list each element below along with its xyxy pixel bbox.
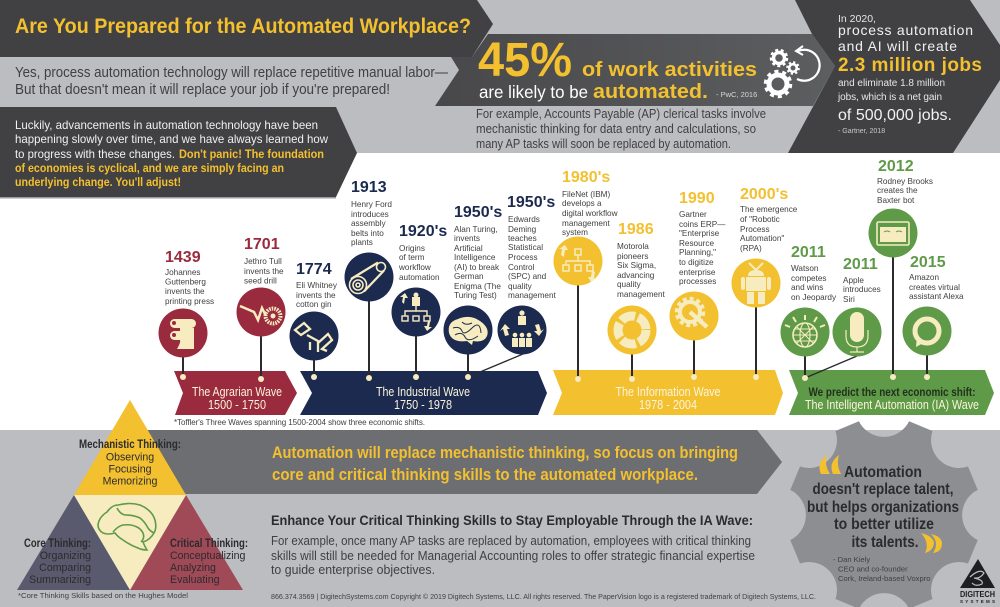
logo: Digitech Systems: DIGITECH bbox=[960, 590, 995, 599]
milestone: 1439 printing press: 1439 bbox=[165, 249, 201, 266]
panel: 45% statistic banner bbox=[435, 34, 835, 106]
wave band: agrarian bbox=[174, 371, 297, 415]
milestone: 1990 ERP: "Enterprise bbox=[679, 229, 720, 238]
milestone: 1950s Turing: (AI) to break bbox=[454, 263, 500, 272]
icon: opening quote mark bbox=[819, 455, 841, 474]
quote text: but helps organizations bbox=[807, 499, 959, 516]
wave band: industrial: 1750 - 1978 bbox=[394, 398, 452, 412]
milestone: 2012 Baxter: creates the bbox=[877, 186, 918, 195]
text: core thinking bbox=[24, 538, 91, 586]
wave band: agrarian: The Agrarian Wave bbox=[192, 385, 282, 399]
milestone: 1774 cotton gin: invents the bbox=[296, 291, 336, 300]
milestone: 2015 Alexa bbox=[902, 254, 964, 380]
icon: Watson globe bbox=[785, 315, 825, 347]
milestone: 1439 printing press: Johannes bbox=[165, 268, 201, 277]
stat text: are likely to be: are likely to be bbox=[479, 82, 588, 102]
panel: 2020 jobs statistic: jobs, which is a net gain bbox=[837, 92, 942, 103]
text: critical thinking: Critical Thinking: bbox=[170, 538, 248, 550]
text block: intro: Yes, process automation technology will replace repetitive manual labor— bbox=[15, 64, 448, 81]
panel: 2020 jobs statistic: of 500,000 jobs. bbox=[838, 107, 952, 124]
wave band: information bbox=[553, 370, 783, 415]
text: core thinking: Core Thinking: bbox=[24, 538, 91, 550]
panel: don't panic chevron bbox=[0, 107, 357, 197]
text block: intro: But that doesn't mean it will replace your job if you're prepared! bbox=[15, 81, 390, 98]
milestone: 2000s RPA: The emergence bbox=[740, 205, 798, 214]
milestone: 1950s Edwards Deming: Process bbox=[508, 253, 538, 262]
panel: 2020 jobs statistic bbox=[788, 0, 1000, 153]
text: critical thinking: Analyzing bbox=[170, 562, 216, 574]
milestone: 1439 printing press bbox=[158, 249, 214, 380]
text: core thinking: Summarizing bbox=[29, 574, 91, 586]
source: PwC: - PwC, 2016 bbox=[716, 90, 757, 99]
milestone: 2015 Alexa: assistant Alexa bbox=[909, 292, 964, 301]
text: critical thinking bbox=[170, 538, 248, 586]
milestone: 1950s Turing: German bbox=[454, 272, 484, 281]
milestone: 1950s Edwards Deming: Statistical bbox=[508, 243, 543, 252]
milestone: 2015 Alexa: Amazon bbox=[909, 273, 939, 282]
milestone: 1990 ERP: to digitize bbox=[679, 258, 714, 267]
milestone: 1774 cotton gin: 1774 bbox=[296, 261, 332, 278]
footnote: Toffler: *Toffler's Three Waves spanning 1500-2004 show three economic shifts. bbox=[174, 418, 425, 427]
text: mechanistic thinking: Memorizing bbox=[103, 476, 157, 488]
arrow banner: mechanistic thinking message bbox=[140, 430, 782, 494]
icon: closing quote mark bbox=[921, 533, 942, 553]
milestone: 2011 Watson: Watson bbox=[791, 264, 819, 273]
milestone: 1980s FileNet: FileNet (IBM) bbox=[562, 190, 610, 199]
milestone: 2011 Siri: introduces bbox=[843, 285, 881, 294]
triangle diagram: thinking skills bbox=[17, 400, 248, 590]
milestone: 1950s Edwards Deming: management bbox=[508, 291, 557, 300]
milestone: 1990 ERP bbox=[670, 190, 726, 380]
icon: gears with circular arrow bbox=[766, 46, 820, 96]
text block: AP example: For example, once many AP tasks are replaced by automation, employees with critical thinking bbox=[271, 534, 751, 548]
wave band: information: The Information Wave bbox=[616, 385, 721, 399]
milestone: 1920s workflow bbox=[392, 223, 447, 380]
milestone: 1986 Six Sigma: pioneers bbox=[617, 252, 648, 261]
text block: accounts payable example: mechanistic thinking for data entry and calculations, so bbox=[476, 122, 756, 136]
milestone: 1950s Edwards Deming: quality bbox=[508, 282, 533, 291]
quote text: doesn't replace talent, bbox=[812, 481, 954, 498]
text block: luckily: Luckily, advancements in automation technology have been bbox=[15, 119, 318, 132]
milestone: 1439 printing press: Guttenberg bbox=[165, 278, 206, 286]
logo: Digitech Systems bbox=[960, 559, 995, 604]
milestone: 1986 Six Sigma: quality bbox=[617, 280, 642, 289]
milestone: 2000s RPA: (RPA) bbox=[740, 244, 762, 253]
milestone: 1701 seed drill: invents the bbox=[244, 267, 284, 276]
milestone: 1950s Edwards Deming: Control bbox=[508, 263, 535, 272]
milestone: 1990 ERP: enterprise bbox=[679, 268, 716, 277]
quote text: its talents. bbox=[852, 534, 918, 551]
milestone: 1950s Edwards Deming: (SPC) and bbox=[508, 272, 547, 281]
big stat: 45%: 45% bbox=[478, 34, 572, 87]
quote text: to better utilize bbox=[834, 516, 934, 533]
text: core thinking: Organizing bbox=[40, 550, 91, 562]
panel: 2020 jobs statistic: and AI will create bbox=[838, 38, 957, 54]
milestone: 1913 assembly belts: 1913 bbox=[351, 179, 387, 196]
text: critical thinking: Conceptualizing bbox=[170, 550, 245, 562]
attribution: CEO and co-founder bbox=[838, 564, 908, 574]
milestone: 1950s Turing bbox=[444, 204, 523, 380]
text block: luckily: underlying change. You'll adjust! bbox=[15, 176, 181, 189]
text: mechanistic thinking bbox=[79, 439, 181, 488]
milestone: 2000s RPA: Process bbox=[740, 225, 770, 234]
milestone: 1986 Six Sigma: Motorola bbox=[617, 242, 649, 251]
milestone: 2011 Siri: Apple bbox=[843, 276, 864, 285]
text block: accounts payable example: many AP tasks will soon be replaced by automation. bbox=[476, 137, 731, 151]
milestone: 1950s Turing: Turing Test) bbox=[454, 291, 497, 300]
text: critical thinking: Evaluating bbox=[170, 574, 220, 586]
panel: title chevron bbox=[0, 0, 493, 57]
stat text: of work activities: of work activities bbox=[582, 58, 757, 81]
milestone: 1990 ERP: Resource bbox=[679, 239, 714, 248]
milestone: 1950s Edwards Deming: 1950's bbox=[507, 194, 555, 211]
milestone: 2011 Siri: Siri bbox=[843, 295, 855, 304]
attribution: - Dan Kiely bbox=[833, 555, 870, 564]
wave band: agrarian: 1500 - 1750 bbox=[208, 398, 266, 412]
milestone: 2011 Siri: 2011 bbox=[843, 256, 878, 273]
milestone: 1990 ERP: coins ERP— bbox=[679, 220, 726, 229]
title: Are You Prepared for the Automated Workplace? bbox=[15, 15, 471, 38]
icon: org chart bbox=[559, 245, 597, 282]
footer copyright: 866.374.3569 | DigitechSystems.com Copyright © 2019 Digitech Systems, LLC. All rights reserved. The PaperVision logo is a registered trademark of Digitech Systems, LLC. bbox=[271, 592, 816, 601]
milestone: 2011 Watson bbox=[780, 244, 857, 381]
milestone: 1980s FileNet: 1980's bbox=[562, 169, 610, 186]
milestone: 1980s FileNet bbox=[554, 169, 618, 382]
text: mechanistic thinking: Focusing bbox=[108, 464, 152, 476]
panel: 2020 jobs statistic: process automation bbox=[838, 22, 973, 38]
icon: robot bbox=[741, 263, 771, 304]
milestone: 1701 seed drill bbox=[236, 236, 286, 382]
milestone: 1990 ERP: Planning," bbox=[679, 248, 716, 257]
milestone: 1774 cotton gin: cotton gin bbox=[296, 300, 332, 309]
milestone: 1913 assembly belts: Henry Ford bbox=[351, 200, 392, 209]
milestone: 1986 Six Sigma: 1986 bbox=[618, 221, 654, 238]
milestone: 2012 Baxter bbox=[868, 158, 933, 380]
icon: Baxter screen face bbox=[877, 222, 909, 245]
icon: seed drill bbox=[240, 306, 280, 324]
milestone: 1950s Turing: Intelligence bbox=[454, 253, 496, 262]
arrow banner: mechanistic thinking message: Automation will replace mechanistic thinking, so focus on bringing bbox=[272, 444, 738, 462]
panel: 2020 jobs statistic: and eliminate 1.8 million bbox=[838, 78, 945, 89]
milestone: 1913 assembly belts: assembly bbox=[351, 219, 386, 228]
panel: 2020 jobs statistic: 2.3 million jobs bbox=[838, 55, 982, 76]
milestone: 1950s Turing: Enigma (The bbox=[454, 282, 501, 291]
milestone: 1701 seed drill: 1701 bbox=[244, 236, 280, 253]
milestone: 1950s Turing: 1950's bbox=[454, 204, 502, 221]
milestone: 2012 Baxter: Rodney Brooks bbox=[877, 177, 933, 186]
wave band: industrial bbox=[300, 371, 547, 415]
milestone: 2000s RPA: of "Robotic bbox=[740, 215, 780, 224]
milestone: 1701 seed drill: seed drill bbox=[244, 276, 277, 286]
wave band: industrial: The Industrial Wave bbox=[376, 385, 470, 399]
arrow banner: mechanistic thinking message: core and critical thinking skills to the automated workplace. bbox=[272, 466, 698, 484]
icon: people cycle bbox=[500, 310, 544, 347]
icon: cotton gin bbox=[295, 323, 332, 352]
milestone: 1990 ERP: processes bbox=[679, 277, 716, 286]
panel: 2020 jobs statistic: - Gartner, 2018 bbox=[838, 128, 885, 135]
milestone: 2000s RPA: 2000's bbox=[740, 186, 788, 203]
milestone: 1950s Turing: Alan Turing, bbox=[454, 225, 498, 234]
milestone: 1774 cotton gin bbox=[290, 261, 338, 380]
milestone: 2012 Baxter: Baxter bot bbox=[877, 196, 915, 205]
milestone: 1774 cotton gin: Eli Whitney bbox=[296, 281, 338, 290]
milestone: 1920s workflow: automation bbox=[399, 273, 440, 282]
text block: accounts payable example: For example, Accounts Payable (AP) clerical tasks involve bbox=[476, 107, 766, 121]
milestone: 2011 Watson: and wins bbox=[791, 283, 823, 292]
icon: microphone bbox=[846, 312, 868, 352]
wave band: information: 1978 - 2004 bbox=[639, 398, 697, 412]
milestone: 1980s FileNet: develops a bbox=[562, 199, 602, 208]
text: core thinking: Comparing bbox=[39, 562, 91, 574]
milestone: 2012 Baxter: 2012 bbox=[878, 158, 914, 175]
milestone: 1950s Turing: invents bbox=[454, 234, 480, 243]
milestone: 1439 printing press: invents the bbox=[165, 287, 205, 296]
quote text bbox=[807, 464, 959, 551]
milestone: 1986 Six Sigma: advancing bbox=[617, 271, 655, 280]
text block: luckily: happening slowly over time, and we have always learned how bbox=[15, 133, 329, 146]
panel: 2020 jobs statistic: In 2020, bbox=[838, 13, 876, 25]
milestone: 1920s workflow: workflow bbox=[398, 263, 431, 272]
milestone: 1913 assembly belts: plants bbox=[351, 238, 373, 247]
text block: AP example: to guide enterprise objectives. bbox=[271, 563, 435, 577]
logo: Digitech Systems: SYSTEMS bbox=[960, 599, 995, 604]
milestone: 2011 Watson: on Jeopardy bbox=[791, 293, 837, 302]
milestone: 2011 Watson: competes bbox=[791, 274, 826, 283]
attribution: Cork, Ireland-based Voxpro bbox=[838, 574, 930, 583]
heading: enhance critical thinking: Enhance Your Critical Thinking Skills to Stay Employable Through the IA Wave: bbox=[271, 513, 753, 528]
quote text: Automation bbox=[844, 464, 922, 481]
milestone: 1920s workflow: Origins bbox=[399, 244, 425, 253]
milestone: 1990 ERP: Gartner bbox=[679, 210, 707, 219]
text block: AP example: skills will still be needed for Managerial Accounting roles to offer strategic financial expertise bbox=[271, 549, 755, 563]
icon: brain bbox=[449, 317, 488, 345]
milestone: 1913 assembly belts: belts into bbox=[351, 229, 384, 238]
milestone: 1701 seed drill: Jethro Tull bbox=[244, 257, 282, 266]
icon: Alexa ring bbox=[915, 319, 939, 347]
milestone: 2011 Watson: 2011 bbox=[791, 244, 826, 261]
milestone: 1950s Edwards Deming: Deming bbox=[508, 225, 537, 234]
milestone: 1439 printing press: printing press bbox=[165, 297, 214, 306]
milestone: 1986 Six Sigma: Six Sigma, bbox=[617, 261, 656, 270]
panel: quote gear bbox=[790, 421, 978, 607]
text block: luckily: Don't panic! The foundation bbox=[179, 148, 324, 161]
milestone: 1920s workflow: 1920's bbox=[399, 223, 447, 240]
stat text: automated: automated. bbox=[593, 80, 708, 103]
milestone: 2015 Alexa: creates virtual bbox=[909, 283, 960, 292]
milestone: 2000s RPA: Automation" bbox=[740, 234, 784, 243]
milestone: 1913 assembly belts bbox=[344, 179, 394, 381]
milestone: 1950s Edwards Deming bbox=[498, 194, 557, 354]
icon: cycle of arrows bbox=[618, 316, 646, 344]
text: mechanistic thinking: Mechanistic Thinking: bbox=[79, 439, 181, 451]
milestone: 1980s FileNet: digital workflow bbox=[562, 209, 618, 218]
wave band: intelligent automation bbox=[789, 370, 994, 415]
milestone: 2000s RPA bbox=[732, 186, 798, 380]
milestone: 1980s FileNet: system bbox=[562, 228, 588, 237]
milestone: 2011 Siri bbox=[832, 256, 882, 356]
text: mechanistic thinking: Observing bbox=[106, 452, 154, 464]
icon: belt and pulleys bbox=[350, 262, 386, 294]
icon: workflow chart bbox=[400, 292, 432, 331]
milestone: 1980s FileNet: management bbox=[562, 219, 611, 228]
footnote: Hughes model: *Core Thinking Skills based on the Hughes Model bbox=[18, 591, 188, 600]
icon: brain outline bbox=[98, 504, 156, 550]
milestone: 1950s Edwards Deming: Edwards bbox=[508, 215, 540, 224]
text block: luckily: to progress with these changes. bbox=[15, 148, 175, 161]
icon: gear and wrench bbox=[676, 298, 707, 327]
milestone: 1950s Turing: Artificial bbox=[454, 244, 483, 253]
milestone: 1986 Six Sigma bbox=[608, 221, 666, 382]
milestone: 1986 Six Sigma: management bbox=[617, 290, 666, 299]
milestone: 1920s workflow: of term bbox=[399, 253, 425, 262]
icon: printing press roll bbox=[170, 319, 196, 349]
milestone: 2015 Alexa: 2015 bbox=[910, 254, 946, 271]
text block: luckily: of economies is cyclical, and we are simply facing an bbox=[15, 162, 284, 175]
milestone: 1913 assembly belts: introduces bbox=[351, 210, 389, 219]
milestone: 1990 ERP: 1990 bbox=[679, 190, 715, 207]
milestone: 1950s Edwards Deming: teaches bbox=[508, 234, 537, 243]
